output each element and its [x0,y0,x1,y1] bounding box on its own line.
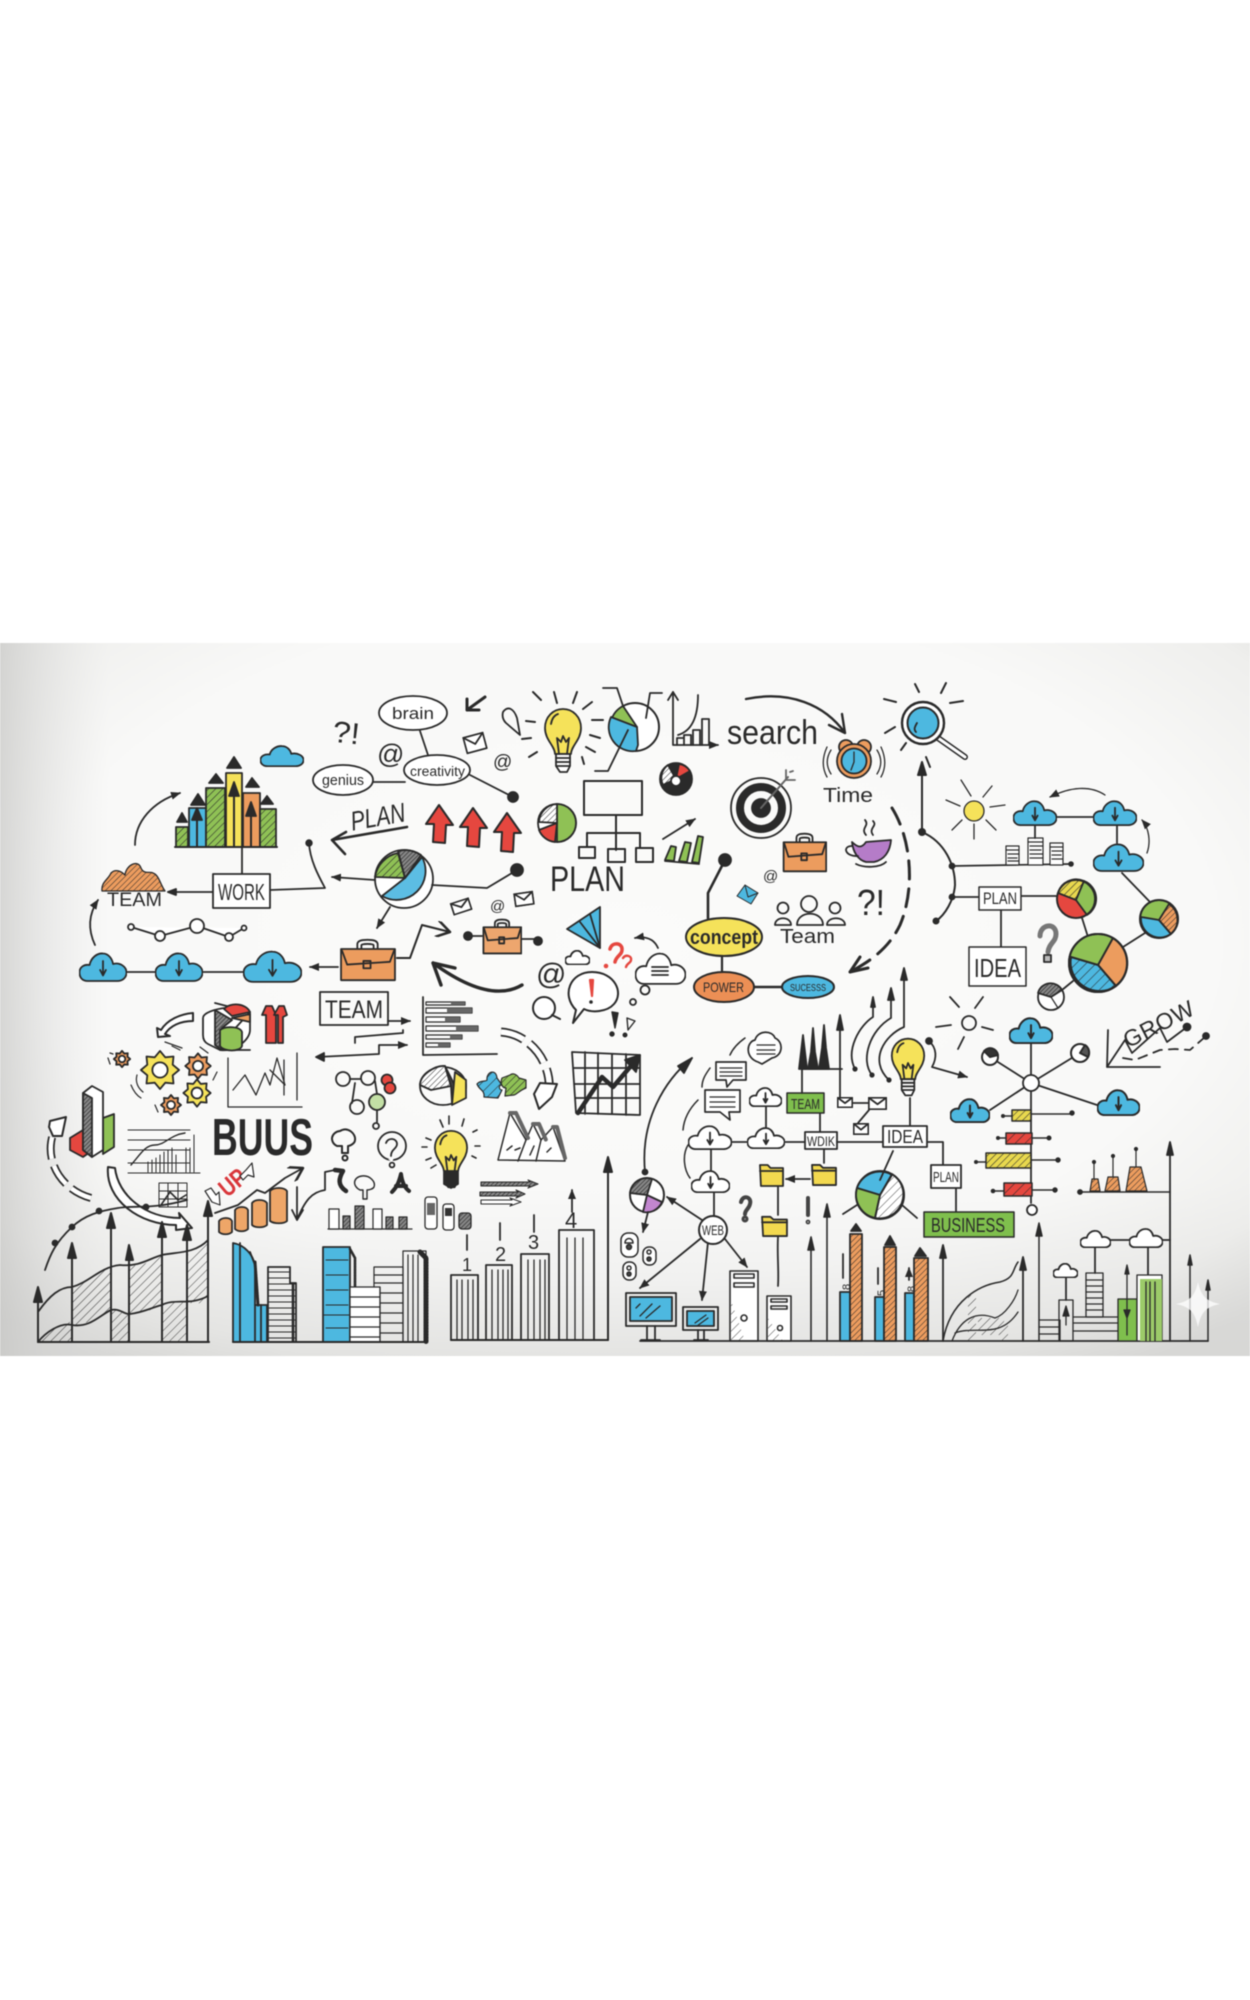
node: WEB [699,1216,727,1244]
box: WDIK: WDIK [807,1133,835,1149]
group: idea tree (right lower) [640,968,1208,1341]
icon: at sign: @ [377,739,404,769]
icon: small grid chart [159,1183,187,1207]
pie chart: idea [843,1151,917,1219]
icon: monitor small [683,1307,718,1340]
dot and arrow from bulb [926,1038,967,1077]
briefcase with connectors [464,920,542,953]
pie: red yellow green [1057,879,1096,918]
axis and arrows [34,1201,212,1342]
arc with branches [919,829,955,924]
double headed arrow [317,1045,407,1057]
icon: small green pie [538,804,576,842]
hatched bands [38,1240,208,1342]
box: PLAN [931,1165,961,1188]
node: WEB: WEB [702,1223,724,1238]
group: wave area chart (bottom left) [34,1201,212,1342]
icon: paper plane [567,907,600,948]
label: PLAN: PLAN [550,860,625,899]
ellipse: genius: genius [322,773,364,789]
arcs beside bubbles [683,1038,745,1178]
small bar chart [328,1206,412,1229]
pie chart: with callouts [595,688,662,771]
photo panel: concrete wall [0,643,1250,1356]
icon: alarm clock [823,740,885,778]
arrow: pie to briefcase [377,907,390,928]
icon: circles network [336,1071,396,1129]
icon: white sun [936,997,993,1049]
icon: yellow bulb with rays [422,1116,480,1188]
arrows below TEAM [388,1020,410,1022]
icon: yellow light bulb with rays [522,692,603,772]
icon: puzzle pieces [477,1072,526,1098]
group: search tree (upper right) [884,683,1178,1010]
group: centre lower icons [420,1066,612,1340]
text: ?!: ?! [331,716,361,751]
curved arrows [852,968,907,1082]
row of blue clouds [79,952,301,982]
building: blue block [323,1247,355,1342]
text: BUUS: BUUS [212,1109,313,1167]
arrow: up to magnifier [918,762,926,832]
orange and blue columns [840,1224,928,1341]
chart: zigzag line [228,1053,302,1107]
icon: speech bubble with exclamation [569,972,618,1023]
small pies [982,1044,1089,1065]
arrows from WEB hub [640,1107,824,1300]
chart: line and bars mini [128,1130,200,1173]
icon: yellow sun [946,780,1005,839]
concept mind map [686,854,834,1002]
box: TEAM: TEAM [325,996,383,1024]
box: IDEA: IDEA [974,953,1022,983]
box: IDEA [969,947,1026,986]
arrow: curved hollow [157,1013,193,1037]
cloud right [1097,1090,1140,1115]
ellipse: concept: concept [690,927,758,949]
chain of circles [128,919,246,941]
icon: at sign: @ [536,958,566,991]
bar chart: rising bars [175,757,277,847]
column numbers [841,1284,918,1296]
number labels: 2 [495,1244,506,1266]
number labels: 1 [462,1255,472,1275]
pie: large [1069,934,1127,992]
arrow: briefcase up right [397,925,450,958]
arrow: curved to cloud [635,937,658,948]
icon: exclamation marks [610,1012,635,1037]
red arrows trio [426,805,521,852]
envelopes and at sign: @ [490,898,505,915]
box: PLAN: PLAN [983,889,1017,908]
connector with dot [432,864,523,888]
arrow: dashed hollow curve [501,1032,557,1109]
icon: black pie disc [660,763,692,795]
ellipse: creativity [373,731,518,802]
icon: envelope [463,733,487,753]
icon: red question marks [604,944,631,968]
pie chart: purple [630,1178,664,1212]
icon: target with dart [731,770,795,838]
baseline [233,1341,426,1343]
hub circle [1023,1075,1039,1091]
mini chart: green bars and arrow [663,819,703,864]
building: blue tower [233,1243,267,1342]
speech bubbles [705,1032,781,1120]
icon: 3D pie [203,1003,250,1050]
column numbers: 5 [876,1290,888,1296]
icon: 3D pie chart [420,1066,466,1105]
building: striped [268,1267,296,1342]
icon: cylinders [425,1197,471,1230]
arrow: tall [604,1157,612,1340]
chart: grow line [1107,1024,1209,1067]
icon: server towers [730,1271,791,1341]
bar chart: numbered bars 1-4 [451,1190,608,1340]
arrow: pie to locks [643,1212,648,1232]
ellipse: brain [379,696,447,730]
column numbers: 8 [841,1284,853,1290]
buildings right [1039,1265,1162,1341]
orange cylinder bars [219,1188,287,1234]
icon: small cloud key [355,1176,374,1199]
white clouds row [1053,1229,1170,1300]
label: TEAM: TEAM [107,890,162,911]
box: TEAM green: TEAM [791,1097,820,1113]
path line [355,1030,403,1043]
icon: hollow arrows [480,1180,538,1206]
at sign and blue envelope [737,868,778,904]
arrow: dashed hollow left [49,1117,91,1198]
icon: magnifier [884,683,965,767]
number labels: 3 [528,1232,539,1254]
group: web network (lower centre right) [621,1032,837,1341]
line to IDEA [837,1098,956,1213]
icon: monitor large [626,1293,676,1340]
tall axis with arrow [1167,1142,1173,1341]
pie chart: main blue [375,850,433,908]
text: UP with arrows [205,1163,254,1205]
arrow: team to bars [135,793,180,845]
label: PLAN with arrow: PLAN [348,797,408,837]
text: Team: Team [780,926,835,948]
icon: grey question mark [1040,926,1056,962]
label: PLAN with arrow [332,797,408,854]
building: striped block [350,1251,426,1342]
icon: 3D bars [70,1086,114,1157]
horizontal bars list chart [423,997,497,1055]
group: brain mind map [313,696,542,953]
icons: locks [621,1233,656,1280]
folders [760,1165,836,1236]
group: idea and plan (top centre) [522,688,909,1002]
wave lines [38,1240,208,1312]
number labels: 4 [565,1208,577,1233]
arrow: pie to left [332,877,375,880]
arrow head for dashed curve [850,957,868,972]
ellipse: power [694,972,754,1002]
box: WORK [213,874,270,908]
arrows far right [1036,1223,1210,1341]
arrow: long curve up [642,1058,692,1174]
group: paper plane and thoughts [433,907,685,1037]
arrow head left [316,1053,324,1061]
group: gears and buus (lower left) [45,1003,412,1270]
envelopes [838,1098,886,1134]
box: PLAN [979,887,1021,910]
icon: at sign small: @ [493,752,512,773]
arrow: rising line [215,1168,303,1213]
connectors [952,873,1150,990]
group: blue buildings [233,1243,426,1342]
text: UP with arrows: UP [213,1163,253,1203]
box: PLAN: PLAN [933,1169,959,1186]
ellipse: creativity: creativity [410,764,465,779]
chart: grid with rising arrow [572,1052,640,1115]
connector lines [168,843,325,892]
text: Time: Time [823,785,873,807]
arrows: vertical pair [808,1204,830,1341]
group: team and list chart [316,992,640,1115]
number labels [462,1208,577,1275]
pie: small white [1038,983,1064,1010]
mini chart: rising bars with axes [668,692,718,745]
ellipse: concept [686,918,762,956]
icon: red arrows [262,1006,287,1043]
arrow: small dark [467,697,485,710]
icon: blue cloud [260,746,304,766]
icon: orange briefcase small [784,834,826,871]
arrow: dashed curve [852,808,909,971]
text: GROW: GROW [1119,995,1199,1053]
chart: curves hatched [940,1245,1026,1341]
icon: search bubble [533,997,560,1019]
icon: purple cup [846,820,891,867]
question mark grey [741,1197,750,1220]
arrow: search to clock [746,696,845,733]
diagram: org chart [579,781,653,862]
ellipse: power: POWER [703,979,744,995]
clouds white [688,1088,785,1192]
icon: thick letter [335,1170,346,1191]
at sign and blue envelope: @ [763,868,778,885]
text: ?!: ?! [857,882,885,923]
icon: mountain chart [498,1113,565,1161]
ellipse: brain: brain [392,704,434,723]
icon: TEAM hatched cloud [102,864,165,891]
ellipse: genius [313,765,373,795]
icon: gears [108,1042,217,1115]
icon: team people [775,896,845,925]
arrow: arc between clouds [1050,788,1105,797]
pie: right [1140,900,1178,938]
icon: cloud key [332,1129,355,1160]
icon: bulb yellow [892,1039,924,1095]
icon: small cloud [565,951,590,964]
arrow: long hollow curve [108,1167,192,1230]
icon: pin [503,708,520,735]
arrow: clouds to team [90,900,98,945]
box: BUSINESS: BUSINESS [931,1215,1005,1237]
arrow: down and squiggle [292,1170,335,1220]
watermark sparkle [1176,1282,1220,1327]
envelopes and at sign [451,892,534,915]
horizontal bars [974,1110,1075,1196]
wave lines lower [38,1296,208,1342]
lines and arrow from towers [802,1015,843,1097]
arrow: arc right [1142,820,1149,853]
arrow: big curved black [433,963,522,991]
factory chimneys [1078,1148,1170,1194]
box: BUSINESS [924,1212,1014,1237]
exclamation [806,1198,810,1224]
ellipse: success: SUCESSS [790,982,826,994]
group: team work chart (top left) [79,746,450,982]
baseline long [640,1340,1208,1342]
end circle [1027,1205,1037,1215]
group: hub and grow (right) [950,995,1220,1341]
text: search: search [727,714,818,752]
blue clouds cluster [1013,801,1143,871]
ellipse: success [782,976,834,998]
icon: thought cloud [630,954,685,1005]
box: IDEA: IDEA [887,1127,923,1147]
box: TEAM green [787,1093,824,1113]
arrow: briefcase to cloud [310,966,338,968]
hub lines [990,1043,1097,1203]
curve with dots [45,1200,187,1270]
tall black towers [799,1025,829,1069]
shelf with cylinders [952,838,1073,866]
icon: question bubble [378,1132,406,1167]
cloud top [1009,1018,1053,1043]
cloud left [950,1099,990,1122]
icon: orange briefcase [341,940,395,980]
column numbers: 8 [906,1286,918,1292]
icon: thick A [392,1174,409,1192]
box: WORK: WORK [218,879,265,905]
